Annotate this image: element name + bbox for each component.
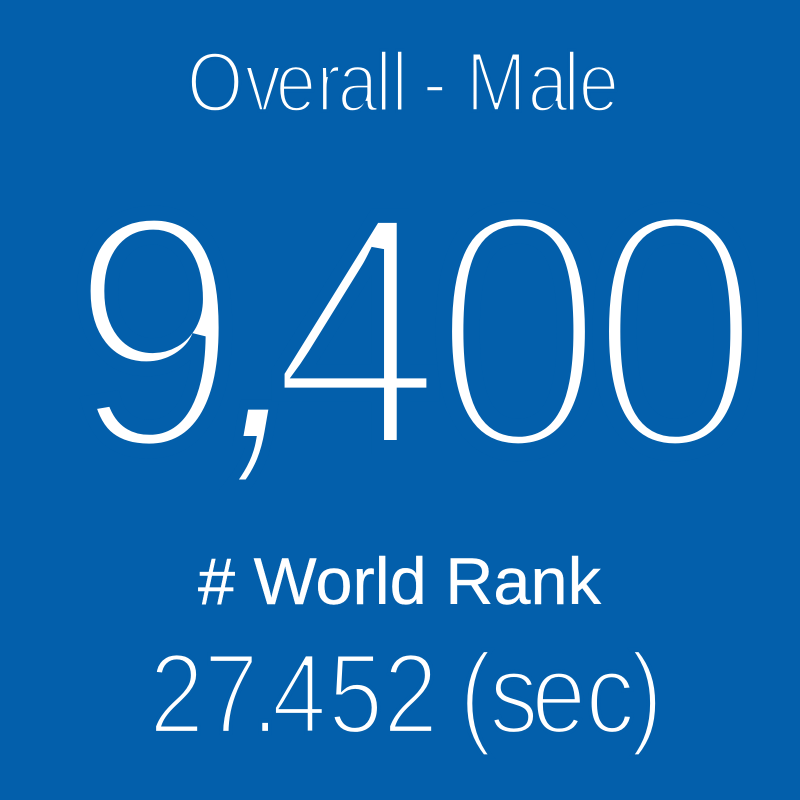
metric value: 27.452 (sec) (149, 630, 663, 758)
big number: 0 (589, 141, 762, 522)
title: Overall - Male (187, 35, 619, 129)
metric label: # World Rank (198, 544, 602, 618)
big number: 4 (271, 144, 442, 519)
big number: 9 (69, 145, 240, 520)
big number: 0 (432, 141, 605, 522)
big number: , (224, 133, 310, 513)
